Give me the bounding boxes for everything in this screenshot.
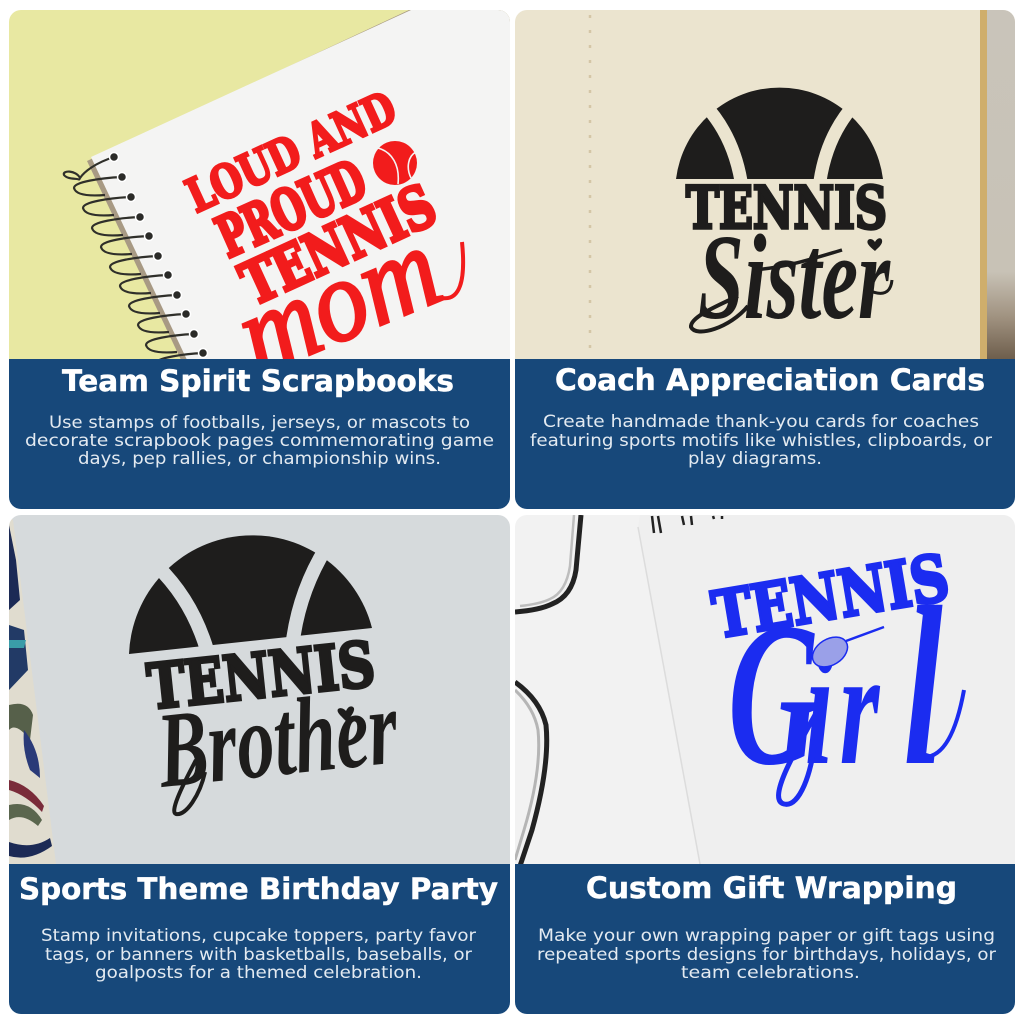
band: caption panel bbox=[515, 359, 1015, 509]
stamp: tennis: TENNIS bbox=[686, 174, 887, 242]
body text: Create handmade thank-you cards for coaches bbox=[543, 412, 979, 432]
stamp: tennis: TENNIS bbox=[144, 627, 378, 724]
body text: team celebrations. bbox=[681, 963, 860, 983]
panel: Coach Appreciation Cards bbox=[515, 10, 1016, 509]
spiral binding bbox=[64, 157, 203, 362]
icon: half tennis ball bbox=[676, 88, 883, 181]
band: caption panel bbox=[9, 359, 510, 509]
body text: Make your own wrapping paper or gift tags using bbox=[538, 926, 995, 946]
panel: Team Spirit Scrapbooks bbox=[9, 10, 510, 509]
body text bbox=[41, 926, 476, 983]
photo: tennis brother stamp on textured paper bbox=[9, 515, 510, 864]
heading: Coach Appreciation Cards bbox=[555, 363, 985, 397]
stamp: loud and proud tennis mom: mom bbox=[219, 203, 457, 400]
stamp: loud and proud tennis mom: TENNIS bbox=[231, 171, 446, 319]
stamp: sister: Sister bbox=[698, 210, 891, 345]
body text: Stamp invitations, cupcake toppers, party favor bbox=[41, 926, 476, 946]
icon: tennis ball bbox=[373, 141, 417, 185]
body text bbox=[25, 413, 494, 469]
photo: red tennis mom stamp on spiral notebook bbox=[9, 10, 510, 359]
body text: tags, or banners with basketballs, baseballs, or bbox=[45, 945, 472, 965]
heading: Custom Gift Wrapping bbox=[586, 871, 957, 905]
body text: days, pep rallies, or championship wins. bbox=[78, 449, 441, 469]
floral fabric bbox=[9, 515, 56, 864]
stamp: loud and proud tennis mom: PROUD bbox=[207, 147, 376, 271]
body text: featuring sports motifs like whistles, clipboards, or bbox=[530, 431, 992, 451]
stamp: brother: Brother bbox=[151, 667, 404, 811]
heading: Sports Theme Birthday Party bbox=[19, 872, 498, 906]
stamp: girl: r bbox=[840, 616, 881, 799]
stamp: loud and proud tennis mom: LOUD AND bbox=[178, 81, 404, 223]
notepad bbox=[638, 515, 1016, 864]
photo: tennis girl stamp on notepad beside glasses bbox=[515, 515, 1016, 866]
stamp: brother bbox=[161, 696, 396, 816]
icon: heart bbox=[867, 238, 882, 251]
icon: half tennis ball bbox=[129, 535, 372, 654]
stamp: tennis: TENNIS bbox=[707, 541, 954, 654]
body text: decorate scrapbook pages commemorating game bbox=[25, 431, 494, 451]
heading: Team Spirit Scrapbooks bbox=[62, 364, 454, 398]
stamp: girl: i bbox=[805, 616, 833, 799]
stamp: girl: l bbox=[903, 561, 943, 813]
spiral binding bbox=[652, 516, 722, 533]
band: caption panel bbox=[9, 864, 510, 1014]
body text: repeated sports designs for birthdays, holidays, or bbox=[537, 945, 996, 965]
body text: play diagrams. bbox=[688, 449, 822, 469]
photo: tennis sister stamp on cream card bbox=[515, 10, 1016, 359]
band: caption panel bbox=[515, 864, 1015, 1014]
stamp: sister bbox=[689, 234, 894, 334]
panel: Custom Gift Wrapping bbox=[515, 515, 1016, 1014]
stamp: loud and proud tennis mom bbox=[182, 92, 466, 359]
icon: heart bbox=[338, 706, 354, 722]
body text: goalposts for a themed celebration. bbox=[95, 963, 422, 983]
stamp: girl: G bbox=[728, 580, 820, 807]
glasses bbox=[515, 515, 581, 866]
body text: Use stamps of footballs, jerseys, or mascots to bbox=[49, 413, 470, 433]
icon: tennis racket bbox=[812, 626, 884, 667]
panel: Sports Theme Birthday Party bbox=[9, 515, 510, 1014]
stamp: girl bbox=[732, 604, 966, 807]
body text bbox=[530, 412, 992, 469]
body text bbox=[537, 926, 996, 983]
